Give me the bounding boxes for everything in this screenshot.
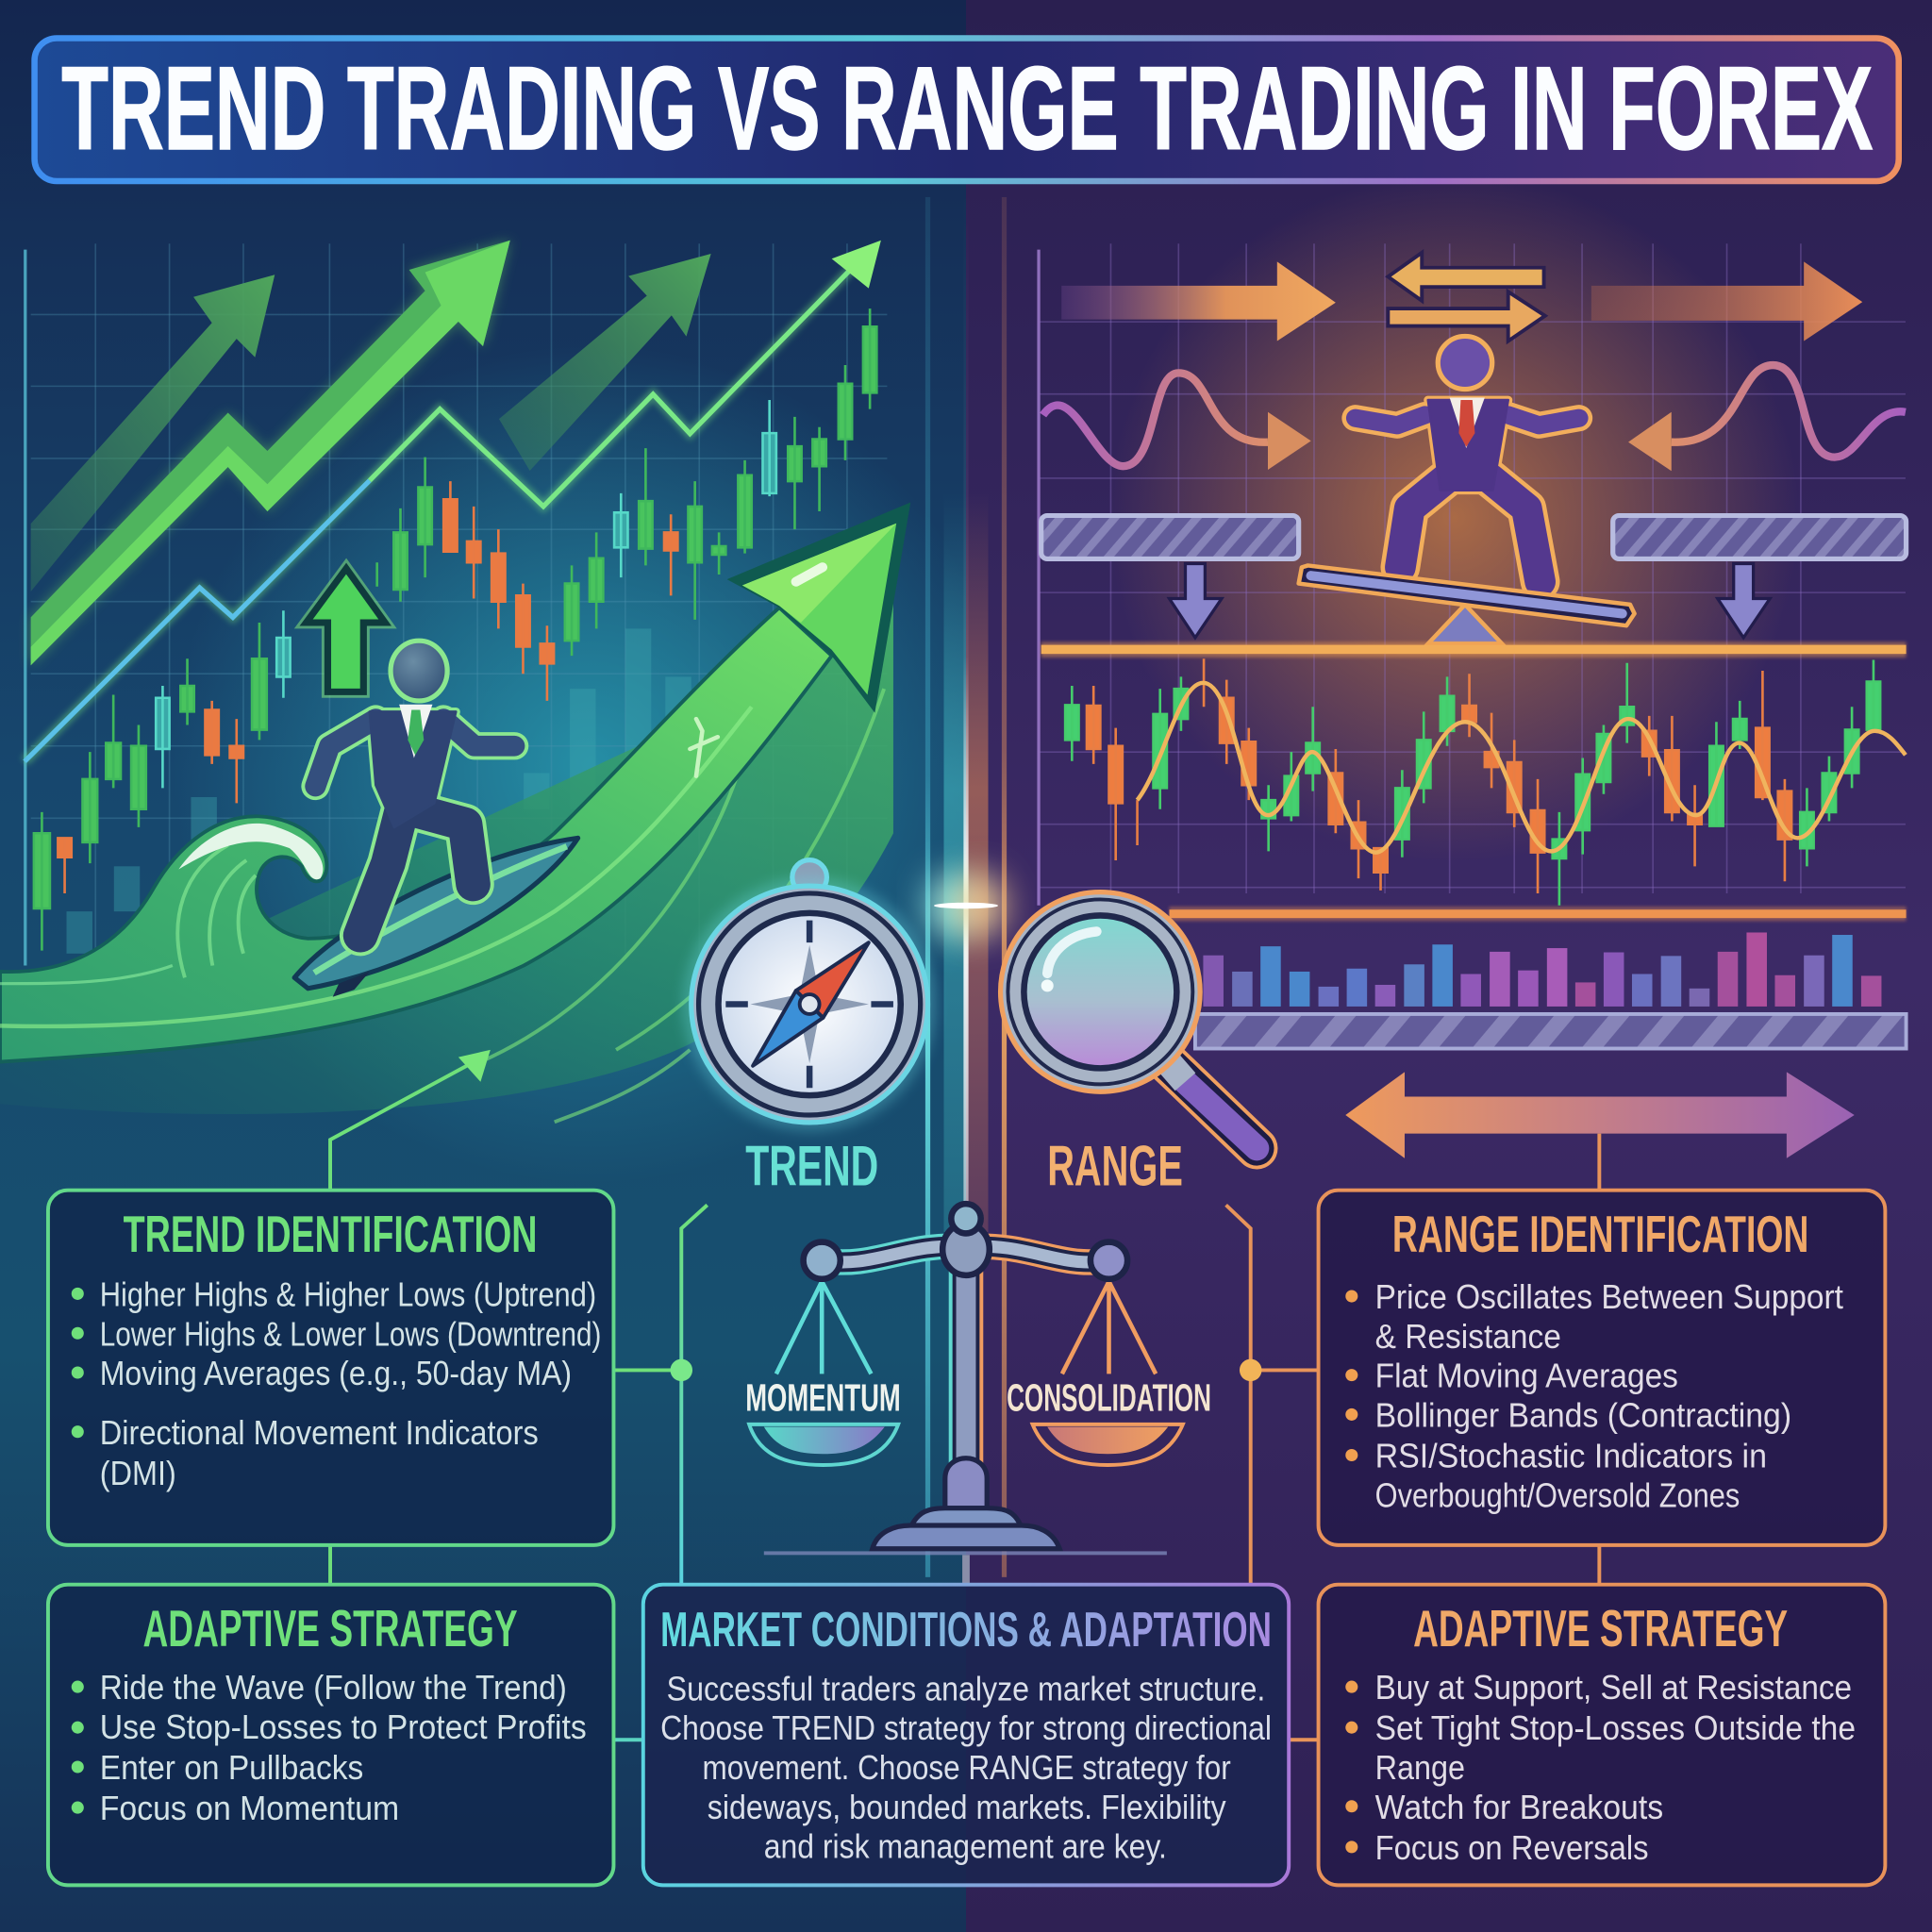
bullet list: Focus on Reversals bbox=[1375, 1828, 1649, 1867]
panel: range identification bbox=[1319, 1191, 1885, 1545]
bullet list: Moving Averages (e.g., 50-day MA) bbox=[100, 1354, 572, 1392]
bullet list: Higher Highs & Higher Lows (Uptrend) bbox=[100, 1274, 596, 1313]
bullet list: Ride the Wave (Follow the Trend) bbox=[100, 1668, 567, 1707]
panel: trend identification bbox=[48, 1191, 613, 1545]
bullet list: & Resistance bbox=[1375, 1317, 1561, 1356]
heading: MARKET CONDITIONS & ADAPTATION bbox=[660, 1603, 1272, 1657]
background: right range half bbox=[966, 0, 1932, 1932]
surfer on board bbox=[294, 641, 578, 997]
bullet list: Set Tight Stop-Losses Outside the bbox=[1375, 1708, 1856, 1747]
paragraph: and risk management are key. bbox=[764, 1827, 1167, 1866]
arrow: top right bbox=[1591, 261, 1862, 341]
bullet list: Price Oscillates Between Support bbox=[1375, 1277, 1843, 1316]
bullet list: Directional Movement Indicators bbox=[100, 1413, 539, 1452]
arrow: top left bbox=[1061, 261, 1336, 341]
range chart: oscillating moving average bbox=[1138, 683, 1906, 853]
bullet list: Focus on Momentum bbox=[100, 1789, 399, 1827]
left chart: candlesticks teal bbox=[156, 400, 776, 788]
bullet list: Use Stop-Losses to Protect Profits bbox=[100, 1707, 587, 1746]
label: CONSOLIDATION: CONSOLIDATION bbox=[1007, 1376, 1211, 1420]
bullet list: Bollinger Bands (Contracting) bbox=[1375, 1395, 1791, 1434]
background: left trend half bbox=[0, 0, 966, 1932]
bullet list: Range bbox=[1375, 1748, 1465, 1787]
surfer figure bbox=[315, 641, 514, 936]
paragraph: sideways, bounded markets. Flexibility bbox=[708, 1788, 1226, 1826]
paragraph: movement. Choose RANGE strategy for bbox=[702, 1748, 1231, 1787]
panel: adaptive strategy trend bbox=[48, 1585, 613, 1885]
panel: adaptive strategy range bbox=[1319, 1585, 1885, 1885]
range boundary lines bbox=[1041, 641, 1907, 921]
right chart: range arrows top bbox=[1061, 253, 1862, 341]
resistance bars with down arrows bbox=[1041, 515, 1907, 638]
label: TREND: TREND bbox=[745, 1134, 878, 1197]
title banner bbox=[35, 38, 1899, 181]
wave and big green arrow bbox=[0, 502, 910, 1122]
balancing figure on seesaw bbox=[1299, 336, 1635, 643]
paragraph: Choose TREND strategy for strong directional bbox=[660, 1708, 1272, 1747]
bullet list: Flat Moving Averages bbox=[1375, 1357, 1678, 1395]
label: MOMENTUM: MOMENTUM bbox=[745, 1376, 901, 1420]
compass icon bbox=[683, 860, 937, 1131]
bullet list: Buy at Support, Sell at Resistance bbox=[1375, 1668, 1852, 1707]
icon: up arrow bbox=[307, 569, 385, 691]
balance scale icon bbox=[749, 1204, 1183, 1585]
magnifying glass icon bbox=[1001, 892, 1257, 1148]
surfboard bbox=[294, 838, 578, 997]
bullet list: Overbought/Oversold Zones bbox=[1375, 1475, 1740, 1514]
right chart: oscillation waves with arrows bbox=[1043, 365, 1906, 471]
bullet list bbox=[1345, 1668, 1856, 1867]
left chart: candlesticks green bbox=[34, 308, 876, 951]
paragraph bbox=[660, 1669, 1272, 1866]
bullet list: Enter on Pullbacks bbox=[100, 1748, 363, 1787]
bullet list bbox=[72, 1274, 601, 1492]
range chart: candles green bbox=[1065, 660, 1880, 906]
bullet list: Lower Highs & Lower Lows (Downtrend) bbox=[100, 1314, 601, 1353]
left chart: grid bbox=[25, 243, 887, 966]
left chart: faded upward arrows bbox=[31, 254, 711, 591]
icon: double arrow bbox=[1345, 1072, 1855, 1158]
bullet list: (DMI) bbox=[100, 1454, 176, 1492]
connector lines bbox=[330, 1050, 1599, 1740]
range chart: volume bars bbox=[1203, 932, 1881, 1007]
paragraph: Successful traders analyze market structure. bbox=[667, 1669, 1265, 1707]
heading: ADAPTIVE STRATEGY bbox=[143, 1599, 518, 1657]
left chart: candlesticks red bbox=[58, 481, 677, 893]
right chart: grid bbox=[1039, 243, 1906, 906]
left chart: bright zigzag arrow bbox=[31, 241, 510, 665]
panel: market conditions and adaptation bbox=[643, 1585, 1289, 1885]
label: RANGE: RANGE bbox=[1047, 1134, 1183, 1197]
bullet list bbox=[1345, 1277, 1843, 1514]
left chart: faint volume bars bbox=[67, 628, 691, 954]
center divider with flare bbox=[925, 185, 1007, 1577]
support hatched bar bbox=[1195, 1014, 1907, 1049]
bullet list: Watch for Breakouts bbox=[1375, 1788, 1663, 1826]
arrow: center left bbox=[1388, 253, 1544, 301]
left chart: thin glowing trend line bbox=[25, 241, 881, 761]
range chart: candles orange bbox=[1087, 658, 1791, 893]
arrow: center right bbox=[1388, 291, 1545, 341]
bullet list bbox=[72, 1668, 587, 1827]
bullet list: RSI/Stochastic Indicators in bbox=[1375, 1437, 1767, 1475]
heading: TREND IDENTIFICATION bbox=[124, 1205, 537, 1263]
